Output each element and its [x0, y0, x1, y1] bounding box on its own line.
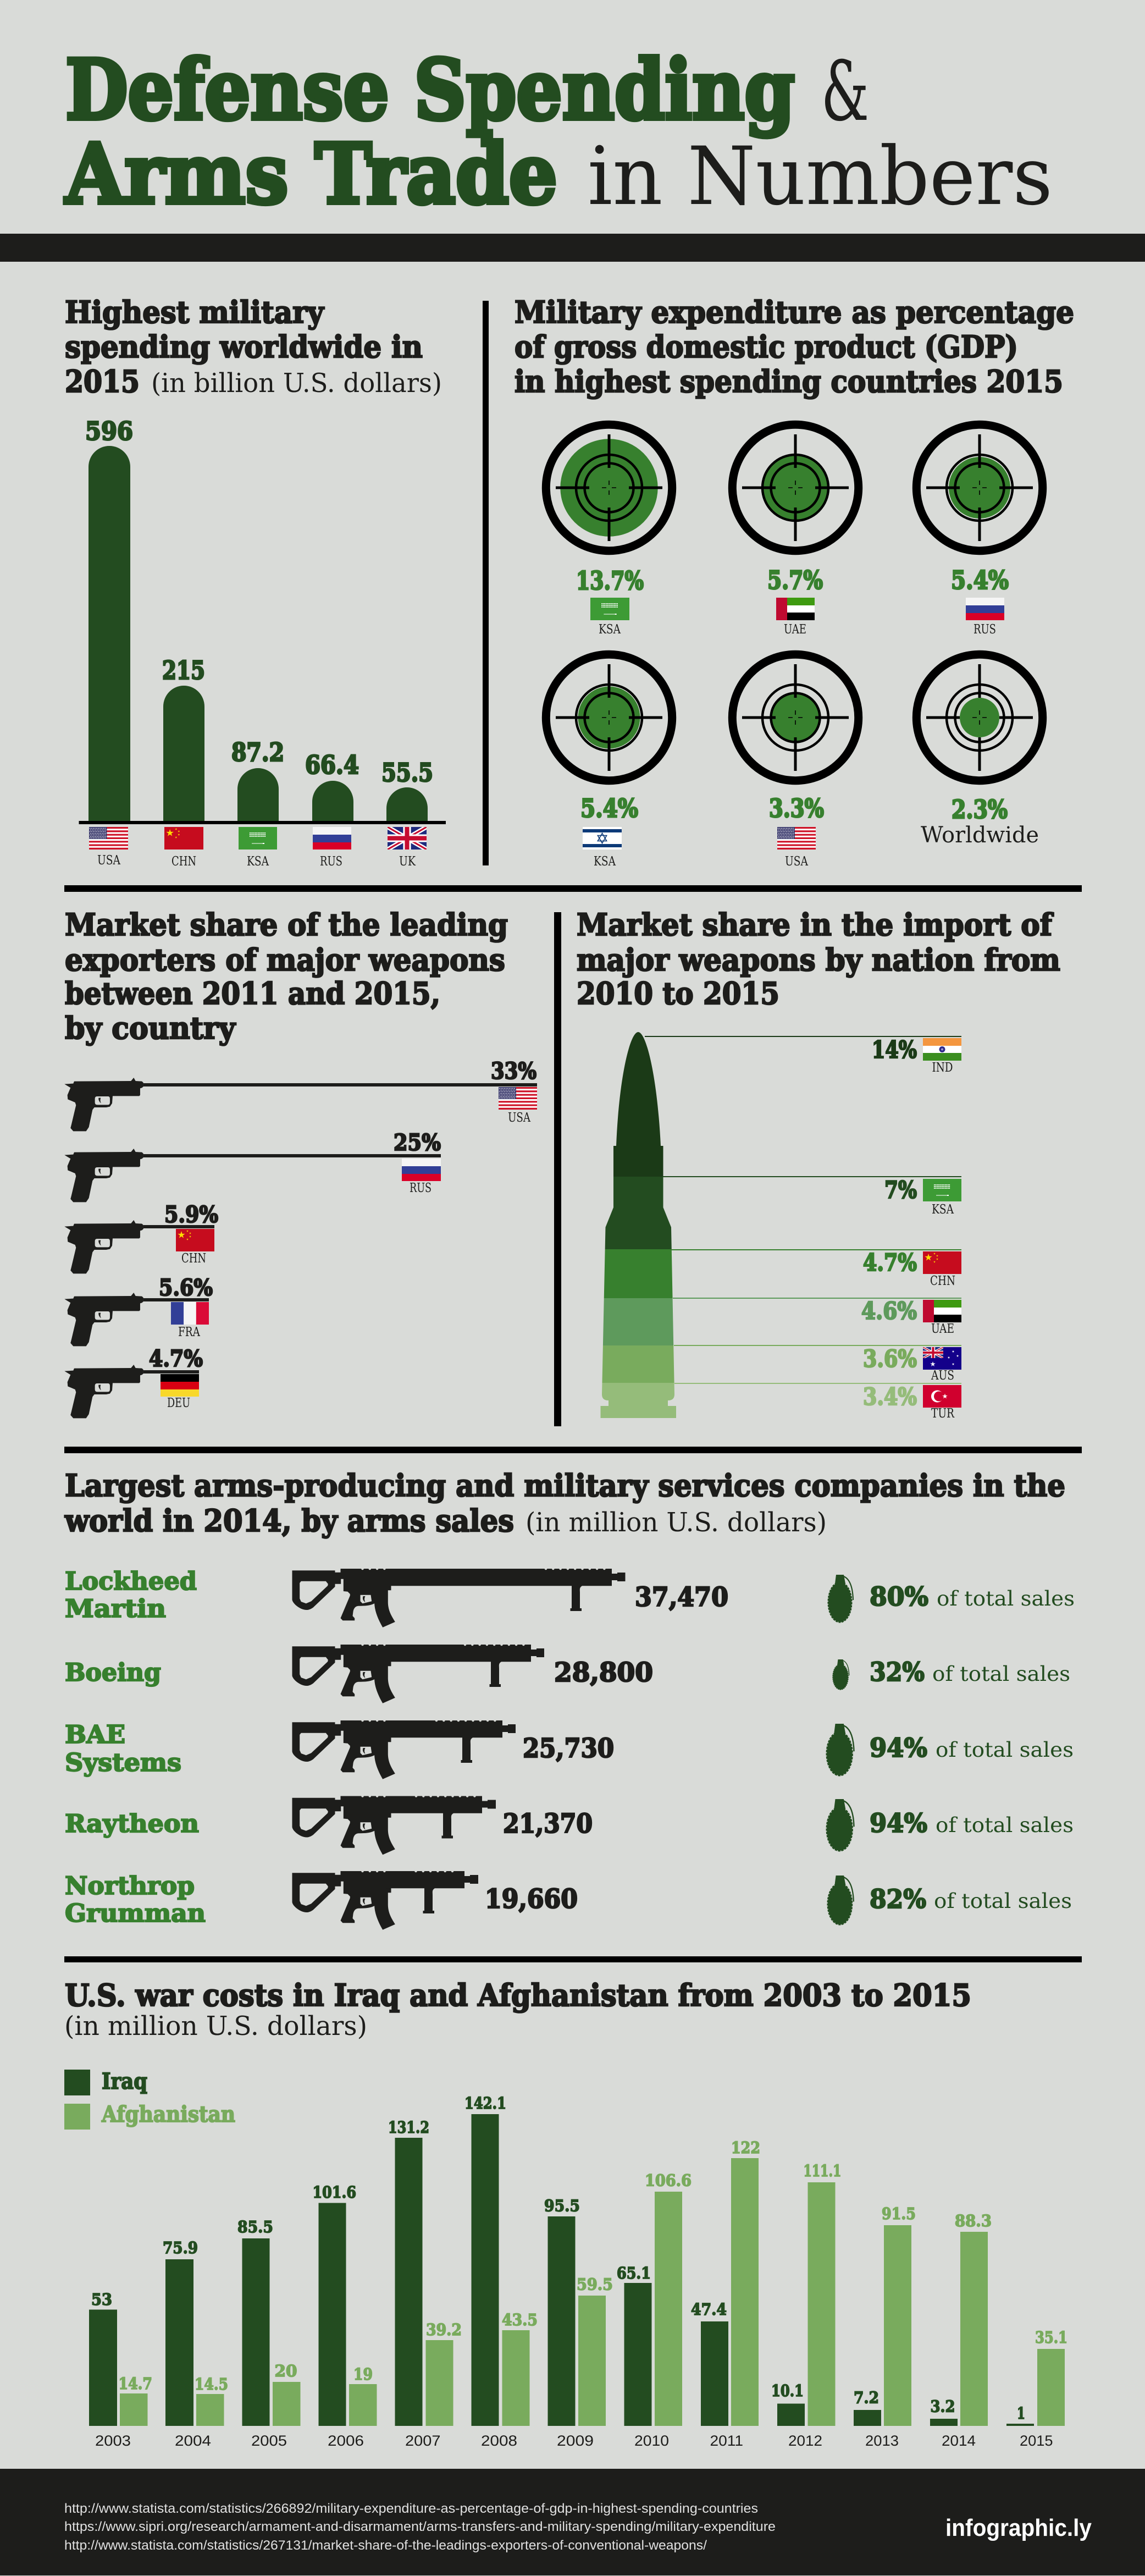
- panel: highest military spending: [65, 294, 446, 869]
- company row: Lockheed Martin: 37,470: [635, 1582, 728, 1613]
- import row: TUR 3.4%: TUR: [931, 1406, 955, 1421]
- company row: Boeing: 28,800: [554, 1657, 653, 1688]
- values: Iraq: 65.1: [617, 2264, 651, 2282]
- year axis labels: [95, 2432, 1053, 2449]
- company row: Raytheon: Raytheon: [65, 1809, 199, 1838]
- values: Afghanistan: 111.1: [804, 2161, 841, 2180]
- year axis labels: 2014: [942, 2432, 976, 2449]
- footer: [0, 2469, 1145, 2575]
- values: Iraq: 47.4: [691, 2300, 727, 2319]
- year axis labels: 2005: [251, 2432, 287, 2449]
- import row: CHN 4.7%: CHN: [930, 1274, 955, 1288]
- values: Iraq: 95.5: [544, 2196, 580, 2215]
- pistol bar: CHN 5.9%: CHN: [181, 1251, 206, 1266]
- values: Afghanistan: 106.6: [645, 2171, 692, 2189]
- pistol bar: USA 33%: USA: [508, 1111, 530, 1125]
- pistol bar: CHN 5.9%: [64, 1201, 218, 1273]
- values: Afghanistan: 14.7: [119, 2374, 152, 2393]
- footer sources: http://www.statista.com/statistics/266892/military-expenditure-as-percentage-of-gdp-in-highest-spending-countries: [64, 2501, 758, 2516]
- values: Afghanistan: 91.5: [882, 2204, 916, 2223]
- heading: highest military spending: Highest military: [65, 294, 325, 330]
- pistol bar: DEU 4.7%: 4.7%: [149, 1345, 203, 1372]
- grouped bar chart: [89, 2094, 1067, 2449]
- company row: Raytheon: 21,370: [503, 1808, 593, 1839]
- values: Afghanistan: 122: [731, 2138, 760, 2157]
- pistol bar: DEU 4.7%: [64, 1345, 203, 1418]
- pistol bar: RUS 25%: 25%: [394, 1129, 441, 1156]
- values: Afghanistan: 39.2: [426, 2320, 462, 2339]
- company row: Raytheon: of total sales: [936, 1813, 1074, 1837]
- company row: Northrop Grumman: [65, 1871, 1072, 1930]
- bar chart: military spending: KSA: [247, 854, 269, 869]
- target: worldwide 2.3%: Worldwide: [921, 823, 1039, 848]
- values: Afghanistan: 43.5: [502, 2310, 538, 2329]
- bar chart: military spending: 215: [162, 655, 205, 685]
- values: Afghanistan: 14.5: [195, 2375, 228, 2393]
- legend: Afghanistan: [101, 2101, 235, 2127]
- import row: TUR 3.4%: 3.4%: [863, 1383, 917, 1411]
- heading: companies: [64, 1468, 1065, 1538]
- company row: BAE Systems: BAE: [65, 1720, 125, 1749]
- bar chart: military spending: CHN: [172, 854, 196, 869]
- panel: exporters market share: [64, 907, 537, 1418]
- bar chart: military spending: UK: [399, 854, 416, 869]
- values: Iraq: 142.1: [464, 2094, 506, 2112]
- heading: exporters: by country: [65, 1010, 236, 1046]
- rifle bar: 19,660: [292, 1871, 478, 1930]
- import row: KSA 7%: KSA: [932, 1202, 954, 1217]
- year axis labels: 2013: [865, 2432, 899, 2449]
- target: RUS 5.4%: RUS: [973, 622, 996, 637]
- panel: largest arms companies: [64, 1468, 1075, 1930]
- values: Afghanistan: 59.5: [577, 2275, 613, 2294]
- grenade: 82%: [828, 1876, 854, 1924]
- vertical divider: [483, 301, 489, 865]
- title: &: [821, 44, 869, 140]
- target: RUS 5.4%: 5.4%: [951, 565, 1009, 595]
- heading: war costs: U.S. war costs in Iraq and Afghanistan from 2003 to 2015: [65, 1977, 971, 2013]
- grenade: 32%: [833, 1659, 849, 1690]
- target: UAE 5.7%: UAE: [784, 622, 806, 637]
- rifle bar: 28,800: [292, 1645, 544, 1703]
- values: Iraq: 10.1: [771, 2381, 804, 2400]
- company row: BAE Systems: 94%: [870, 1733, 927, 1763]
- bar chart: military spending: RUS: [320, 854, 342, 869]
- values: Afghanistan: 20: [275, 2362, 297, 2380]
- import row: AUS 3.6%: 3.6%: [863, 1345, 917, 1373]
- vertical divider 2: [554, 912, 561, 1426]
- year axis labels: 2009: [557, 2432, 594, 2449]
- values: Afghanistan: 35.1: [1035, 2328, 1067, 2347]
- target: USA 3.3%: USA: [785, 854, 808, 869]
- bar chart: military spending: 87.2: [231, 737, 284, 767]
- import row: AUS 3.6%: [863, 1345, 961, 1383]
- year axis labels: 2008: [481, 2432, 517, 2449]
- header band: [0, 234, 1145, 262]
- bar chart: military spending: 55.5: [381, 758, 433, 787]
- panel: U.S. war costs: [64, 1977, 1067, 2449]
- footer sources: http://www.statista.com/statistics/267131/market-share-of-the-leadings-exporters-of-conventional-weapons/: [64, 2538, 707, 2553]
- target: RUS 5.4%: [916, 424, 1043, 637]
- year axis labels: 2007: [405, 2432, 441, 2449]
- company row: BAE Systems: [65, 1720, 1074, 1779]
- legend: Iraq: [102, 2068, 147, 2094]
- values: Iraq: 53: [91, 2290, 112, 2309]
- values: Iraq: [91, 2094, 1025, 2423]
- target: KSA 13.7%: 13.7%: [576, 566, 644, 595]
- heading: exporters: Market share of the leading: [65, 907, 508, 942]
- company row: BAE Systems: Systems: [65, 1748, 181, 1777]
- heading: expenditure: [515, 294, 1074, 399]
- values: Iraq: 131.2: [388, 2118, 429, 2137]
- import row: KSA 7%: [884, 1177, 961, 1217]
- bar chart: military spending: 596: [85, 416, 133, 446]
- title: [64, 42, 1053, 223]
- rifle bar: 21,370: [292, 1796, 496, 1855]
- horizontal divider 3: [64, 1447, 1082, 1453]
- heading: importers: major weapons by nation from: [577, 942, 1060, 978]
- horizontal divider: [64, 885, 1082, 892]
- heading: expenditure: in highest spending countries 2015: [515, 363, 1063, 399]
- import row: CHN 4.7%: 4.7%: [863, 1249, 917, 1277]
- grenade: 94%: [827, 1724, 854, 1775]
- company row: Lockheed Martin: 80%: [870, 1582, 928, 1612]
- import row: KSA 7%: 7%: [884, 1177, 917, 1204]
- title: in Numbers: [588, 130, 1053, 223]
- pistol bar: RUS 25%: RUS: [410, 1181, 432, 1195]
- horizontal divider 4: [64, 1956, 1082, 1962]
- import row: TUR 3.4%: [863, 1383, 961, 1421]
- year axis labels: 2015: [1020, 2432, 1053, 2449]
- import row: IND 14%: 14%: [872, 1036, 917, 1064]
- target: KSA 13.7%: [546, 424, 672, 637]
- heading: highest military spending: [65, 294, 442, 399]
- company row: BAE Systems: 25,730: [523, 1733, 614, 1764]
- heading: war costs: (in million U.S. dollars): [64, 2011, 367, 2042]
- target: USA 3.3%: [732, 654, 859, 869]
- year axis labels: 2006: [328, 2432, 364, 2449]
- pistol bar: CHN 5.9%: 5.9%: [164, 1201, 218, 1228]
- target: KSA (Israel flag) 5.4%: 5.4%: [580, 793, 638, 823]
- heading: companies: world in 2014, by arms sales: [64, 1503, 514, 1538]
- company row: Northrop Grumman: 19,660: [485, 1884, 578, 1915]
- company row: Raytheon: 94%: [870, 1808, 927, 1839]
- company row: Lockheed Martin: [65, 1566, 1075, 1628]
- import row: UAE 4.6%: UAE: [931, 1322, 954, 1336]
- target: UAE 5.7%: [732, 424, 859, 637]
- target: UAE 5.7%: 5.7%: [767, 565, 823, 595]
- pistol bar: USA 33%: 33%: [491, 1058, 536, 1084]
- heading: highest military spending: spending worldwide in: [65, 329, 423, 365]
- company row: Boeing: of total sales: [932, 1662, 1070, 1686]
- values: Afghanistan: 19: [353, 2365, 373, 2384]
- pistol bar: FRA 5.6%: 5.6%: [159, 1275, 213, 1301]
- company row: Northrop Grumman: 82%: [870, 1884, 926, 1915]
- pistol bar: FRA 5.6%: [64, 1275, 213, 1346]
- title: Defense Spending: [65, 42, 795, 139]
- company row: Northrop Grumman: Northrop: [65, 1871, 195, 1900]
- company row: Lockheed Martin: of total sales: [937, 1587, 1075, 1610]
- company row: Northrop Grumman: Grumman: [65, 1899, 206, 1928]
- target: USA 3.3%: 3.3%: [769, 793, 824, 823]
- target: KSA 13.7%: KSA: [599, 622, 621, 637]
- bars: Afghanistan: [120, 2158, 1065, 2426]
- import row: AUS 3.6%: AUS: [931, 1369, 954, 1383]
- year axis labels: 2012: [788, 2432, 822, 2449]
- year axis labels: 2011: [710, 2432, 743, 2449]
- bars: Iraq: [89, 2114, 1034, 2426]
- values: Iraq: 7.2: [854, 2389, 879, 2407]
- target: KSA (Israel flag) 5.4%: [546, 654, 672, 869]
- target: worldwide 2.3%: [916, 654, 1043, 848]
- year axis labels: 2003: [95, 2432, 131, 2449]
- panel: military expenditure as percentage of GDP: [515, 294, 1074, 869]
- heading: highest military spending: (in billion U.S. dollars): [151, 368, 442, 399]
- pistol bar: DEU 4.7%: DEU: [167, 1396, 190, 1410]
- bar chart: military spending: 66.4: [305, 750, 359, 780]
- company row: Lockheed Martin: Martin: [65, 1594, 166, 1623]
- legend: [64, 2068, 235, 2130]
- import row: IND 14%: IND: [932, 1061, 953, 1075]
- company row: Boeing: [65, 1645, 1070, 1703]
- heading: exporters: between 2011 and 2015,: [65, 975, 440, 1011]
- import row: UAE 4.6%: 4.6%: [861, 1298, 917, 1325]
- heading: expenditure: of gross domestic product (GDP): [515, 329, 1018, 365]
- values: Afghanistan: 88.3: [955, 2211, 992, 2230]
- bullet chart: [599, 1028, 961, 1421]
- heading: importers: Market share in the import of: [577, 907, 1054, 942]
- values: Iraq: 1: [1017, 2404, 1025, 2423]
- year axis labels: 2010: [634, 2432, 669, 2449]
- company row: BAE Systems: of total sales: [936, 1738, 1074, 1762]
- heading: expenditure: Military expenditure as percentage: [515, 294, 1074, 330]
- pistol bar: USA 33%: [64, 1058, 537, 1131]
- heading: companies: (in million U.S. dollars): [526, 1507, 827, 1538]
- panel: importers market share: [577, 907, 1060, 1421]
- grenade: 80%: [828, 1575, 853, 1622]
- company row: Raytheon: [65, 1796, 1074, 1855]
- heading: importers: [577, 907, 1060, 1011]
- footer sources: https://www.sipri.org/research/armament-and-disarmament/arms-transfers-and-military-spending/military-expenditure: [64, 2519, 776, 2534]
- target: KSA (Israel flag) 5.4%: KSA: [594, 854, 616, 869]
- heading: exporters: exporters of major weapons: [65, 942, 505, 978]
- heading: companies: Largest arms-producing and military services companies in the: [65, 1468, 1065, 1503]
- company row: Boeing: 32%: [870, 1657, 925, 1687]
- rifle bar: 25,730: [292, 1720, 516, 1779]
- pistol bar: RUS 25%: [64, 1129, 441, 1202]
- company row: Northrop Grumman: of total sales: [934, 1889, 1072, 1913]
- company row: Boeing: Boeing: [65, 1658, 161, 1687]
- heading: highest military spending: 2015: [65, 363, 140, 399]
- footer sources: [64, 2501, 776, 2553]
- grenade: 94%: [827, 1799, 854, 1851]
- target: worldwide 2.3%: 2.3%: [952, 795, 1008, 824]
- values: Iraq: 85.5: [237, 2218, 273, 2236]
- values: Iraq: 75.9: [163, 2238, 198, 2257]
- title: Arms Trade: [64, 126, 557, 223]
- rifle bar: 37,470: [292, 1569, 626, 1628]
- year axis labels: 2004: [175, 2432, 211, 2449]
- import row: CHN 4.7%: [863, 1249, 961, 1288]
- values: Iraq: 3.2: [930, 2397, 955, 2416]
- heading: war costs: [64, 1977, 971, 2042]
- bar chart: military spending: USA: [97, 853, 120, 868]
- brand: infographic.ly: infographic.ly: [945, 2514, 1092, 2541]
- values: Iraq: 101.6: [312, 2183, 356, 2202]
- import row: UAE 4.6%: [861, 1298, 961, 1336]
- import row: IND 14%: [872, 1036, 961, 1075]
- heading: exporters: [65, 907, 508, 1046]
- heading: importers: 2010 to 2015: [577, 975, 779, 1011]
- pistol bar: FRA 5.6%: FRA: [178, 1325, 200, 1339]
- bar chart: military spending: [79, 416, 446, 869]
- company row: Lockheed Martin: Lockheed: [65, 1566, 197, 1596]
- values: Afghanistan: [119, 2138, 1067, 2393]
